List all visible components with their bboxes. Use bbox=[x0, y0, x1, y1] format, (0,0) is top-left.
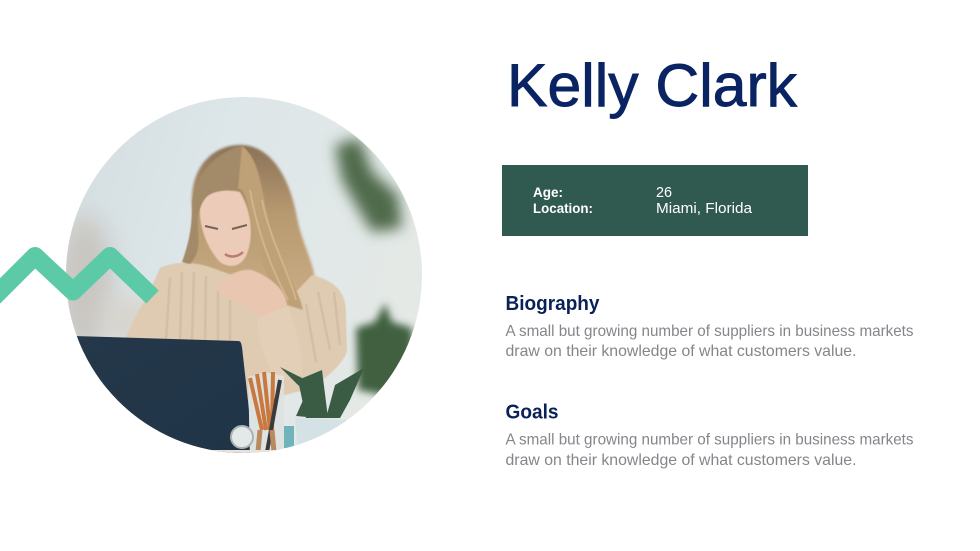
biography: A small but growing number of suppliers in business markets bbox=[506, 323, 914, 340]
photo: woman at laptop bbox=[57, 90, 430, 460]
biography: Biography bbox=[506, 293, 600, 315]
goals bbox=[506, 402, 914, 469]
pencil jar bbox=[231, 372, 284, 452]
info box: Age: bbox=[533, 184, 563, 200]
hair back bbox=[183, 143, 316, 292]
info box bbox=[502, 165, 808, 236]
face bbox=[200, 190, 251, 266]
potted plant bbox=[280, 367, 364, 452]
blurred plant, top right bbox=[335, 138, 402, 232]
laptop bbox=[76, 336, 250, 453]
info box: Location: bbox=[533, 200, 593, 216]
info box: Miami, Florida bbox=[656, 200, 753, 217]
table bbox=[212, 450, 276, 453]
hair front bbox=[182, 146, 243, 264]
forearm sleeve bbox=[261, 314, 268, 317]
biography bbox=[506, 293, 914, 360]
sweater bbox=[122, 263, 347, 404]
hand bbox=[214, 270, 287, 318]
blurred plant, lower right bbox=[356, 303, 414, 395]
goals: Goals bbox=[506, 402, 558, 424]
info box: 26 bbox=[656, 184, 672, 201]
title: Kelly Clark bbox=[507, 52, 798, 119]
biography: draw on their knowledge of what customers value. bbox=[506, 343, 856, 360]
goals: draw on their knowledge of what customers value. bbox=[506, 452, 856, 469]
zigzag accent bbox=[0, 256, 152, 305]
goals: A small but growing number of suppliers in business markets bbox=[506, 432, 914, 448]
